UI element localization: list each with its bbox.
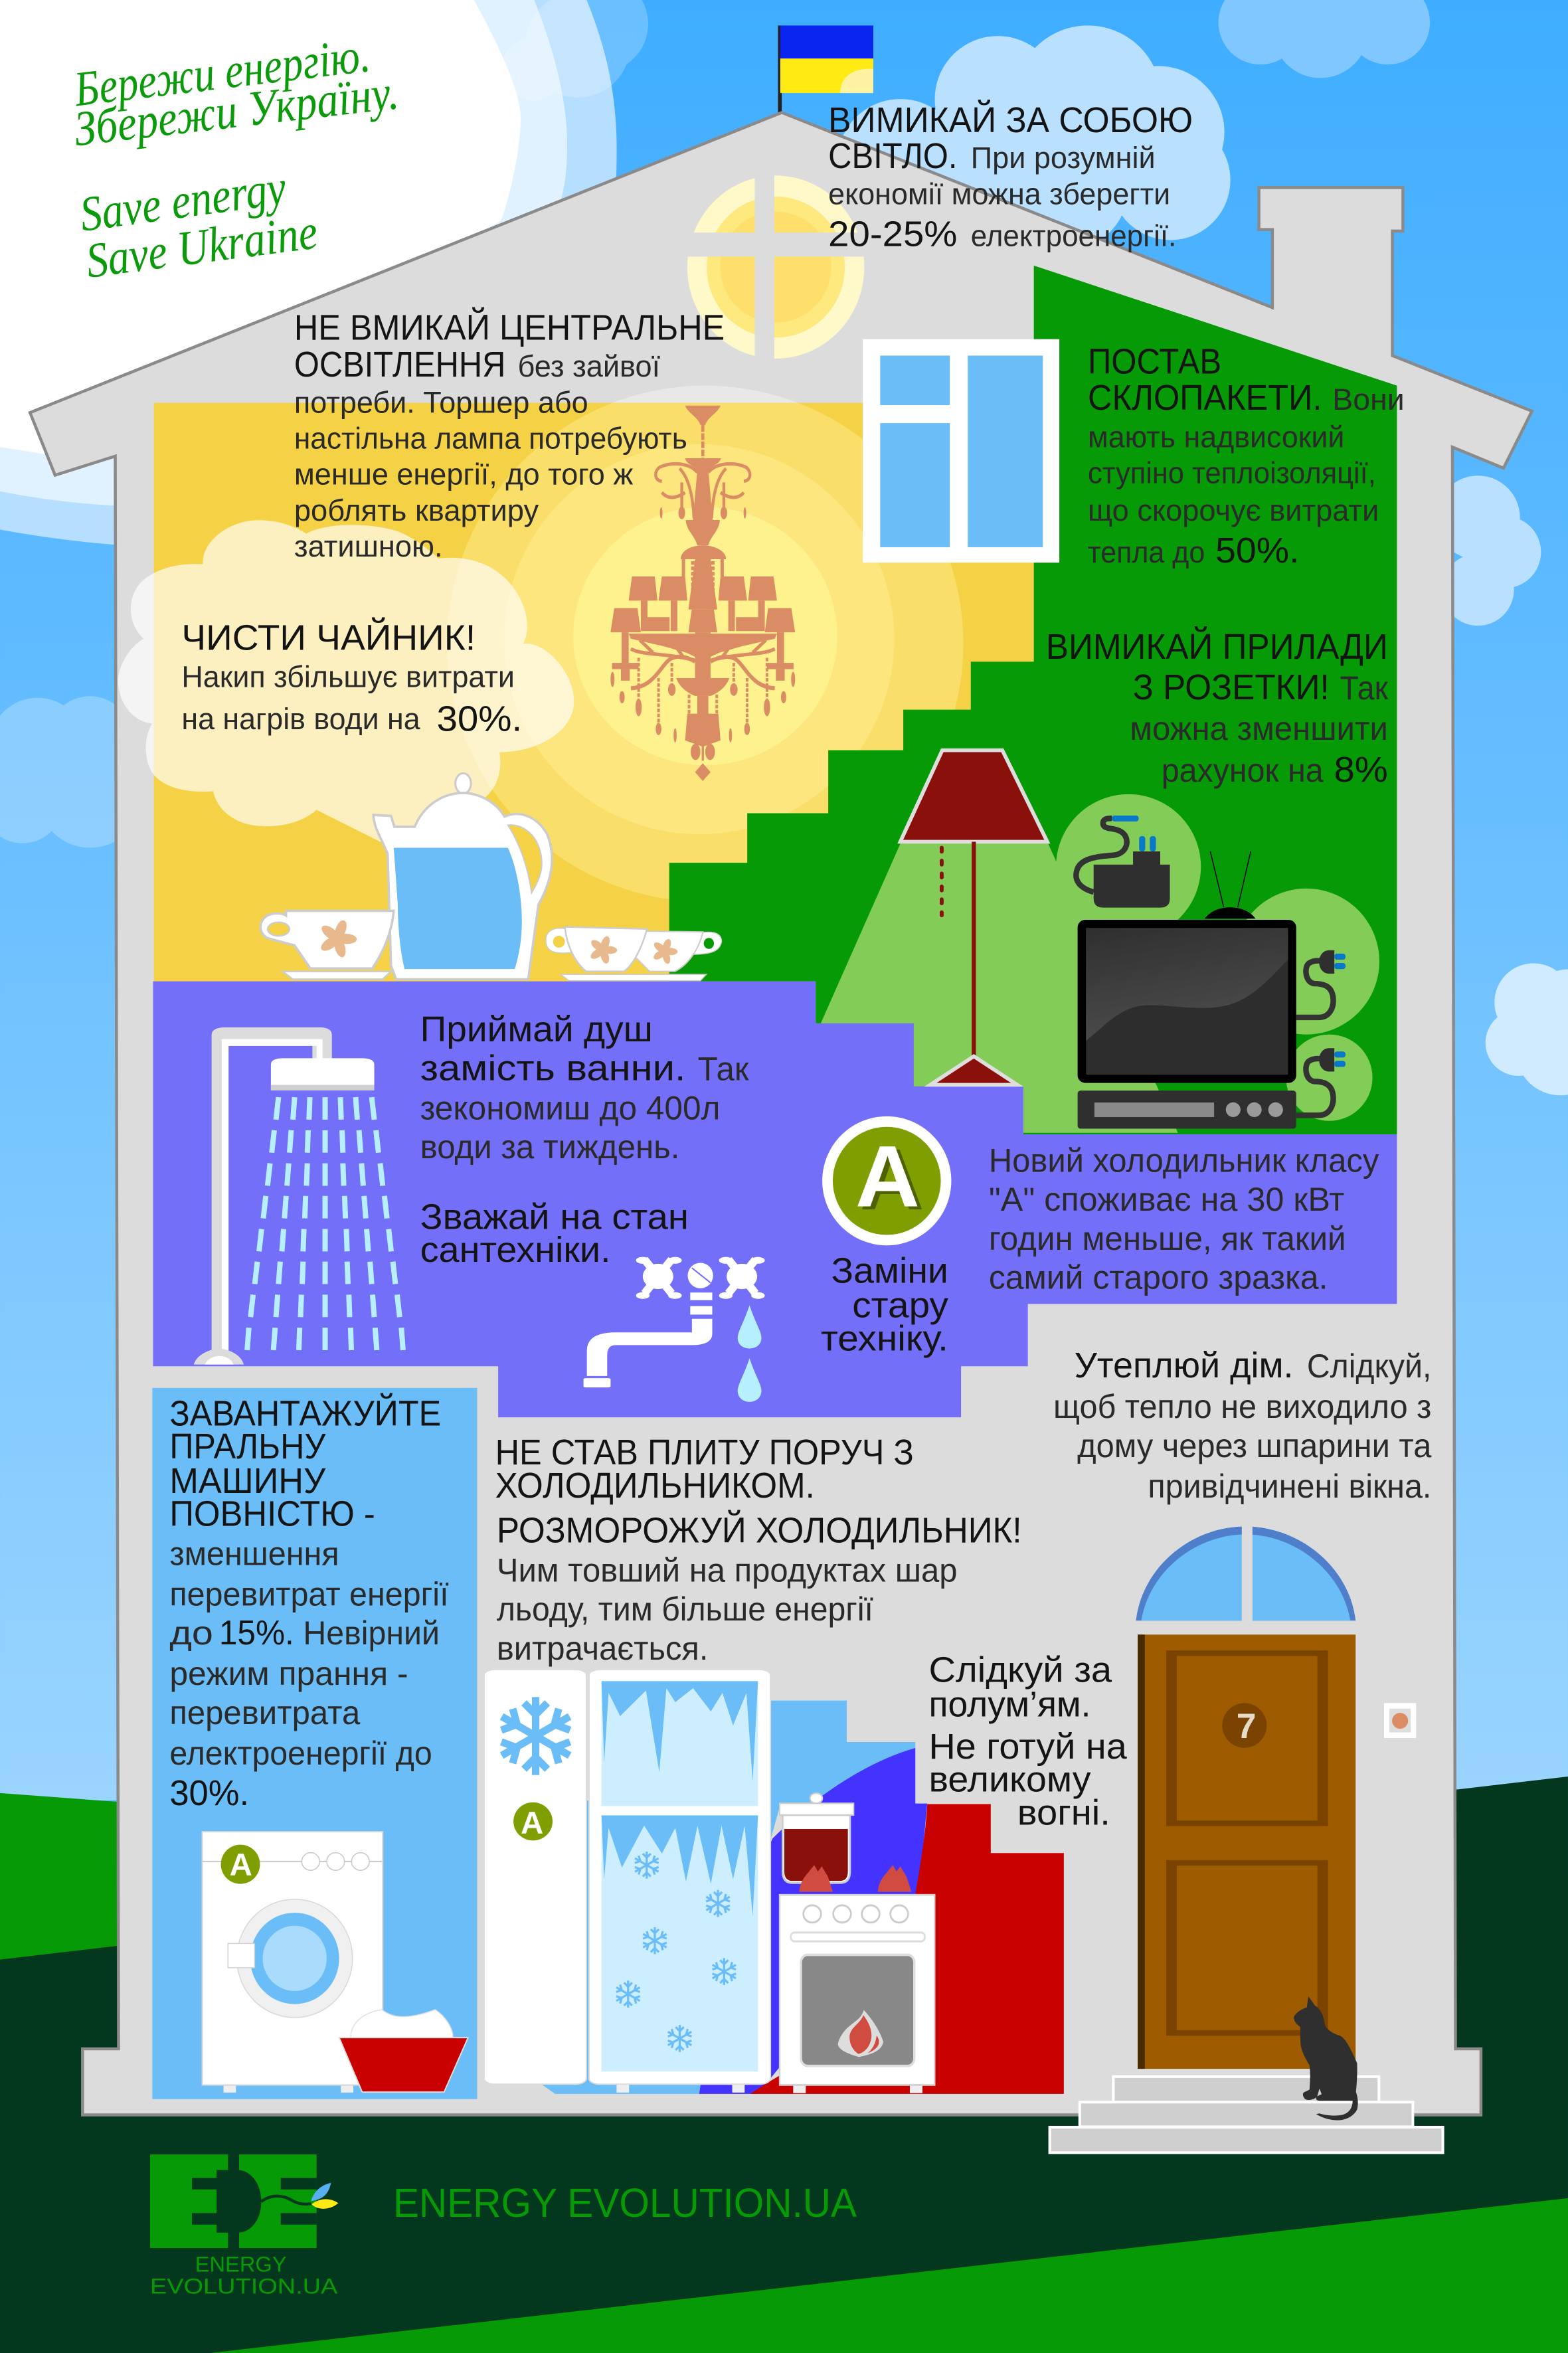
text: class A fridge: годин меньше, як такий	[989, 1220, 1346, 1257]
slogan: Save Ukraine	[83, 205, 321, 289]
icon: small cups	[546, 927, 722, 981]
text: washing machine: ПОВНІСТЮ -	[169, 1494, 375, 1534]
text: central lighting: менше енергії, до того ж	[294, 458, 634, 491]
text: replace appliances: стару	[852, 1286, 948, 1326]
text: turn off light: 20-25%	[828, 215, 957, 254]
text: double glazing: СКЛОПАКЕТИ.	[1088, 378, 1322, 418]
text: clean kettle: Накип збільшує витрати	[181, 660, 515, 694]
text: stove and fridge: РОЗМОРОЖУЙ ХОЛОДИЛЬНИК!	[497, 1510, 1022, 1551]
text: turn off light: економії можна зберегти	[828, 177, 1170, 211]
text: clean kettle: ЧИСТИ ЧАЙНИК!	[181, 617, 476, 657]
text: double glazing: тепла до	[1088, 535, 1205, 569]
icon: faucet with drops	[584, 1257, 765, 1402]
text: class A fridge: Новий холодильник класу	[989, 1142, 1379, 1179]
text: washing machine: перевитрата	[169, 1694, 361, 1731]
text: turn off light: При розумній	[971, 141, 1156, 175]
text: clean kettle: на нагрів води на	[181, 702, 420, 736]
slogan: Save energy	[77, 161, 290, 242]
text: stove and fridge: Чим товший на продуктах шар	[497, 1551, 957, 1589]
text: washing machine: ПРАЛЬНУ	[169, 1427, 326, 1466]
text: insulate: привідчинені вікна.	[1148, 1468, 1431, 1505]
icon: energy class A badge	[822, 1116, 951, 1245]
text: flame: Слідкуй за	[929, 1650, 1112, 1690]
text: double glazing: 50%.	[1215, 531, 1300, 570]
purple room	[153, 982, 1397, 1417]
icon: plug one	[1296, 950, 1346, 1017]
text: stove and fridge: льоду, тим більше енергії	[497, 1591, 873, 1628]
text: flame: великому	[929, 1760, 1091, 1800]
text: washing machine: електроенергії до	[169, 1735, 432, 1772]
icon: snowflakes	[501, 1697, 736, 2052]
door transom window	[1136, 1523, 1355, 1622]
cloud: kettle tip	[118, 520, 574, 842]
doorbell	[1384, 1703, 1416, 1738]
text: plumbing	[420, 1197, 689, 1270]
text: shower: зекономиш до 400л	[420, 1089, 720, 1126]
icon: charger	[1076, 816, 1170, 908]
text: central lighting: настільна лампа потребують	[294, 422, 687, 456]
slogan: Збережи Україну.	[72, 65, 401, 157]
text: washing machine	[169, 1393, 449, 1813]
slogan	[71, 28, 401, 289]
text: central lighting: потреби. Торшер або	[294, 385, 588, 419]
text: flame	[929, 1650, 1128, 1832]
icon: logo	[150, 2154, 338, 2248]
text: class A fridge: самий старого зразка.	[989, 1259, 1328, 1296]
icon: floor lamp	[901, 750, 1047, 1085]
slogan: Бережи енергію.	[71, 28, 373, 117]
icon: shower	[194, 1027, 403, 1365]
text: shower: Так	[698, 1051, 749, 1088]
text: washing machine: 30%.	[169, 1773, 249, 1813]
text: replace appliances: техніку.	[821, 1318, 948, 1358]
window	[863, 339, 1059, 563]
text: shower: замість ванни.	[420, 1049, 686, 1089]
text: unplug devices: рахунок на	[1162, 752, 1324, 789]
text: stove and fridge: витрачається.	[497, 1630, 708, 1667]
green room	[669, 266, 1397, 1134]
door	[1138, 1634, 1355, 2069]
kitchen colored background	[533, 1701, 1064, 2094]
text: class A fridge	[989, 1142, 1379, 1296]
yellow room	[154, 386, 1039, 982]
text: central lighting	[294, 307, 725, 563]
text: shower: води за тиждень.	[420, 1128, 679, 1166]
text: shower	[420, 1009, 749, 1166]
text: class A fridge: "А" споживає на 30 кВт	[989, 1181, 1344, 1218]
text: washing machine: ЗАВАНТАЖУЙТЕ	[169, 1393, 441, 1433]
text: double glazing: ПОСТАВ	[1088, 342, 1221, 382]
text: turn off light: електроенергії.	[971, 219, 1176, 253]
text: washing machine: МАШИНУ	[169, 1461, 326, 1501]
text: replace appliances: Заміни	[831, 1251, 948, 1291]
text: central lighting: НЕ ВМИКАЙ ЦЕНТРАЛЬНЕ	[294, 307, 725, 348]
text: insulate	[1053, 1346, 1432, 1505]
text: insulate: щоб тепло не виходило з	[1053, 1388, 1431, 1425]
text: plumbing: сантехніки.	[420, 1230, 611, 1270]
text: washing machine: 15%.	[219, 1614, 294, 1652]
text: double glazing: мають надвисокий	[1088, 420, 1344, 454]
text: unplug devices: можна зменшити	[1130, 710, 1388, 747]
text: double glazing	[1088, 342, 1405, 570]
badge letter on washer: A	[230, 1848, 252, 1883]
text: central lighting: без зайвої	[517, 349, 661, 383]
text: turn off light: СВІТЛО.	[828, 136, 957, 176]
icon: dvd player	[1078, 1090, 1296, 1129]
text: washing machine: зменшення	[169, 1535, 339, 1572]
text: central lighting: затишною.	[294, 529, 443, 563]
text: flame: полум’ям.	[929, 1685, 1091, 1725]
hills	[0, 1777, 1568, 2353]
text: unplug devices: 8%	[1334, 750, 1388, 790]
icon: energy class A badge: A	[860, 1130, 924, 1228]
sun glow	[0, 0, 617, 545]
website: ENERGY EVOLUTION.UA	[393, 2180, 857, 2225]
icon: glow circles	[1056, 794, 1379, 1121]
text: stove and fridge: НЕ СТАВ ПЛИТУ ПОРУЧ З	[495, 1433, 914, 1472]
text: insulate: дому через шпарини та	[1077, 1427, 1432, 1464]
icon: cup flowers	[589, 935, 677, 965]
text: clean kettle	[181, 617, 522, 739]
flag	[778, 25, 873, 116]
text: clean kettle: 30%.	[436, 699, 522, 739]
logo caption: ENERGY	[195, 2252, 287, 2277]
text: unplug devices: З РОЗЕТКИ!	[1133, 667, 1330, 707]
logo caption	[150, 2252, 338, 2298]
text: unplug devices	[1046, 626, 1388, 790]
clouds	[0, 0, 1568, 1095]
badge letter on fridge: A	[521, 1806, 543, 1841]
attic round window	[675, 168, 870, 363]
door: 7	[1237, 1707, 1257, 1746]
text: washing machine: перевитрат енергії	[169, 1575, 449, 1612]
icon: energy class A badge: A	[855, 1127, 920, 1225]
icon: stove with pot	[780, 1793, 934, 2093]
logo caption: EVOLUTION.UA	[150, 2273, 338, 2298]
text: double glazing: Вони	[1332, 383, 1405, 416]
text: plumbing: Зважай на стан	[420, 1197, 689, 1237]
text: replace appliances	[821, 1251, 948, 1358]
text: washing machine: Невірний	[303, 1614, 440, 1652]
icon: television	[1078, 851, 1296, 1083]
text: stove and fridge: ХОЛОДИЛЬНИКОМ.	[495, 1466, 815, 1506]
icon: chandelier	[610, 406, 795, 781]
text: flame: вогні.	[1017, 1792, 1110, 1832]
text: central lighting: роблять квартиру	[294, 493, 539, 527]
icon: washing machine	[202, 1832, 468, 2093]
icon: devices group	[1056, 794, 1379, 1129]
icon: cat	[1294, 1996, 1358, 2121]
text: washing machine: до	[169, 1614, 213, 1652]
text: central lighting: ОСВІТЛЕННЯ	[294, 345, 505, 385]
text: flame: Не готуй на	[929, 1727, 1128, 1767]
text: double glazing: ступіно теплоізоляції,	[1088, 456, 1376, 489]
sky background	[0, 0, 1568, 1800]
door steps	[1050, 2077, 1443, 2152]
text: unplug devices: ВИМИКАЙ ПРИЛАДИ	[1046, 626, 1388, 667]
text: washing machine: режим прання -	[169, 1655, 408, 1692]
text: insulate: Слідкуй,	[1307, 1348, 1431, 1385]
icon: fridge	[484, 1670, 770, 2093]
icon: kettle and first cup	[260, 773, 552, 979]
icon: plug two	[1296, 1048, 1346, 1115]
text: turn off light: ВИМИКАЙ ЗА СОБОЮ	[828, 100, 1193, 140]
text: shower: Приймай душ	[420, 1009, 653, 1049]
text: unplug devices: Так	[1340, 669, 1388, 707]
panel: laundry blue	[152, 1388, 477, 2099]
text: double glazing: що скорочує витрати	[1088, 493, 1379, 527]
text: stove and fridge	[495, 1433, 1022, 1667]
text: turn off light	[828, 100, 1193, 254]
text: insulate: Утеплюй дім.	[1075, 1346, 1294, 1385]
lamp light	[821, 841, 1178, 1133]
